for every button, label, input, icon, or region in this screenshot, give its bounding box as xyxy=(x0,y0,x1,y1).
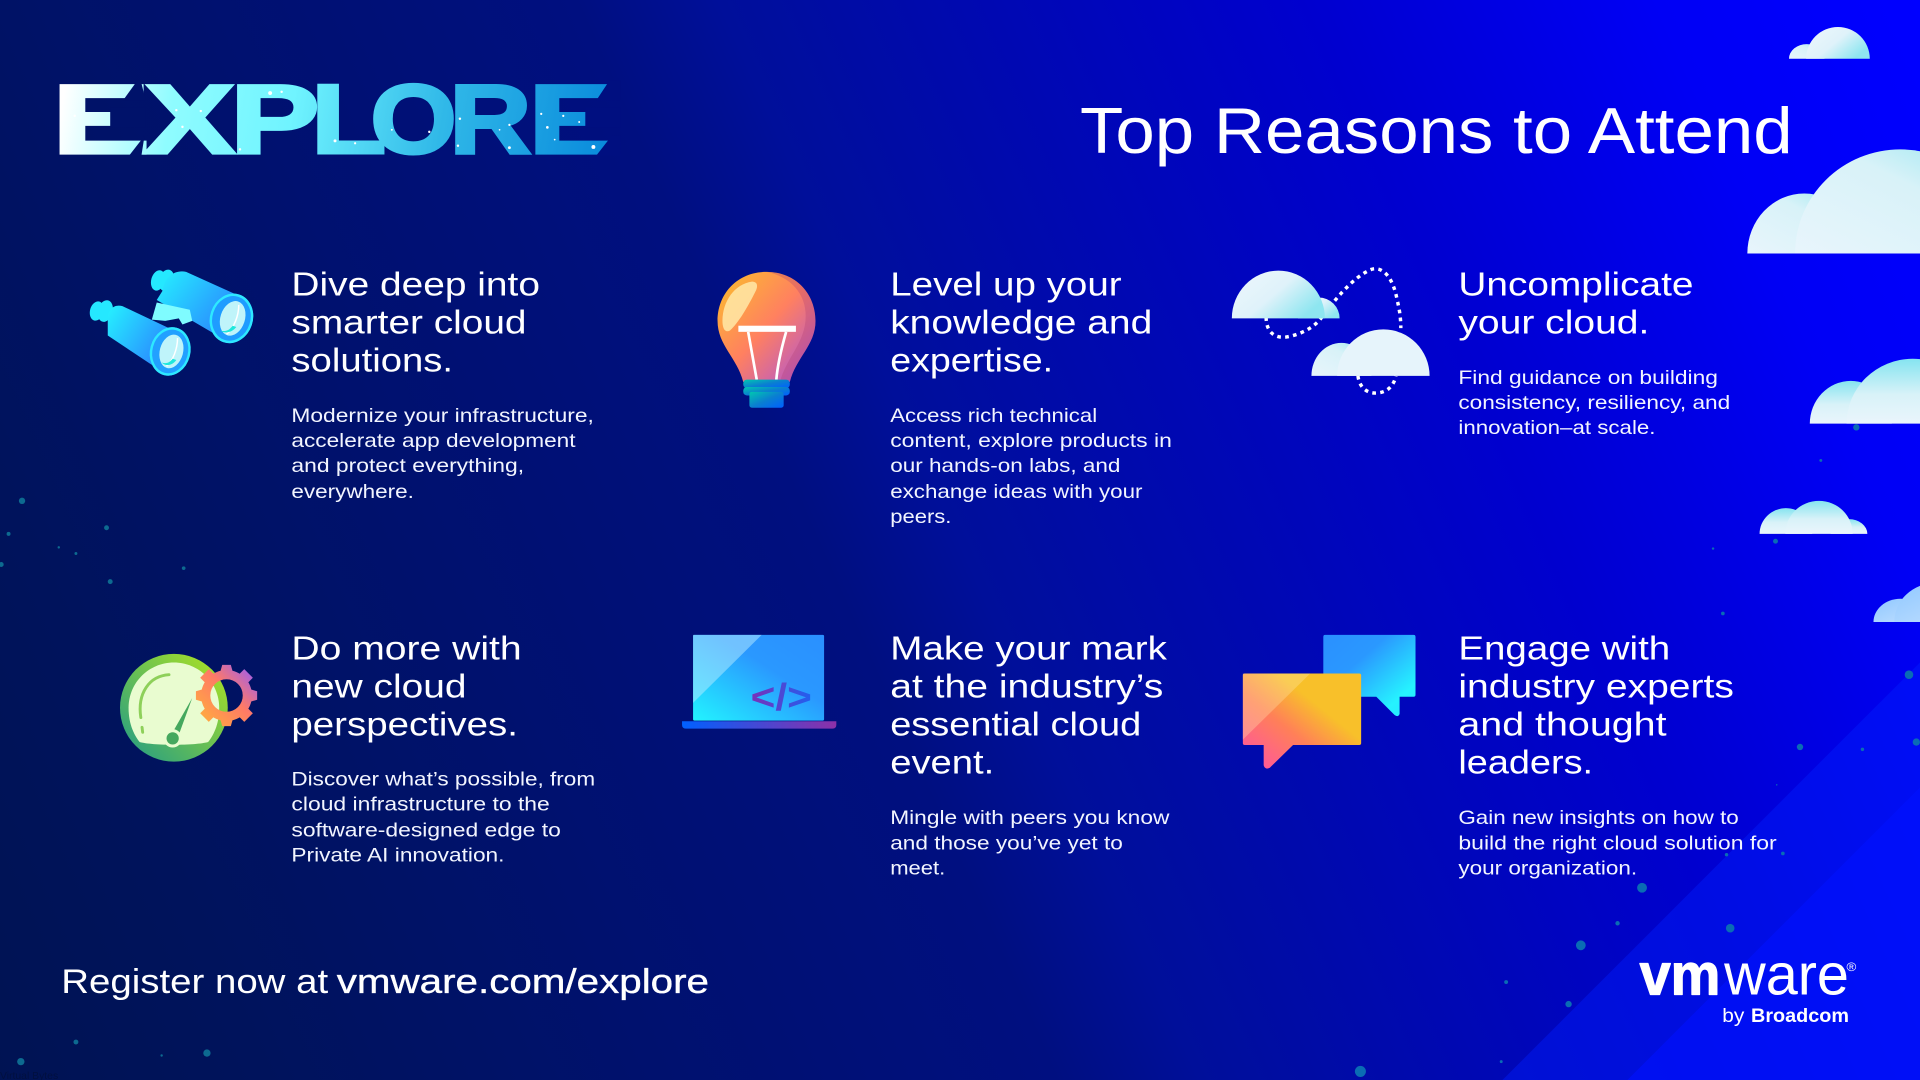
body text: and protect everything, xyxy=(291,455,524,477)
body text: Find guidance on building xyxy=(1458,367,1718,389)
heading xyxy=(291,630,522,743)
body text: cloud infrastructure to the xyxy=(291,794,550,816)
logo: EXPLORE: O xyxy=(370,64,457,174)
heading: knowledge and xyxy=(890,305,1152,342)
heading: Engage with xyxy=(1458,630,1670,667)
body text: innovation–at scale. xyxy=(1458,417,1656,439)
cloud: right middle xyxy=(1810,359,1920,424)
heading: new cloud xyxy=(291,668,467,705)
logo: vmware by Broadcom: ® xyxy=(1847,960,1856,974)
logo: EXPLORE: P xyxy=(230,64,320,174)
heading: Do more with xyxy=(291,630,522,667)
body text: and those you’ve yet to xyxy=(890,833,1123,855)
heading: your cloud. xyxy=(1458,305,1649,342)
cloud: right lower xyxy=(1760,501,1867,534)
logo: EXPLORE: E xyxy=(528,64,619,174)
panel: engage xyxy=(1243,630,1777,879)
body text: accelerate app development xyxy=(291,430,576,452)
icon: clouds with dotted path xyxy=(1232,269,1430,393)
body text: your organization. xyxy=(1458,857,1637,879)
heading: smarter cloud xyxy=(291,305,527,342)
register call to action: vmware.com/explore xyxy=(337,963,709,1001)
logo: EXPLORE: E xyxy=(52,64,150,174)
heading: Dive deep into xyxy=(291,267,540,304)
body text: Gain new insights on how to xyxy=(1458,807,1739,829)
register call to action xyxy=(61,963,709,1001)
icon: laptop: </> xyxy=(751,677,812,719)
body text: Access rich technical xyxy=(890,405,1097,427)
panel: uncomplicate xyxy=(1232,267,1730,439)
heading: Uncomplicate xyxy=(1458,267,1693,304)
heading: expertise. xyxy=(890,343,1053,380)
cloud: top right small xyxy=(1789,27,1870,59)
body text: exchange ideas with your xyxy=(890,481,1143,503)
scattered dots xyxy=(0,424,1920,1077)
cloud: top right large xyxy=(1747,149,1920,253)
diagonal light bands xyxy=(1502,662,1920,1080)
panel: level up xyxy=(718,267,1172,528)
heading: event. xyxy=(890,744,994,781)
heading: Make your mark xyxy=(890,630,1167,667)
heading: solutions. xyxy=(291,343,453,380)
body text: meet. xyxy=(890,857,945,879)
logo: vmware by Broadcom: by xyxy=(1722,1005,1744,1027)
panel: do more xyxy=(120,630,595,866)
logo: EXPLORE xyxy=(52,64,621,174)
body text xyxy=(890,405,1172,528)
body text: Discover what’s possible, from xyxy=(291,769,595,791)
heading xyxy=(291,267,540,380)
body text: Modernize your infrastructure, xyxy=(291,405,594,427)
panel: dive deep xyxy=(88,267,594,503)
body text: peers. xyxy=(890,506,951,528)
heading: essential cloud xyxy=(890,706,1141,743)
body text xyxy=(291,405,594,503)
body text xyxy=(890,807,1170,879)
icon: binoculars xyxy=(88,268,260,380)
icon: chat bubbles xyxy=(1243,635,1416,769)
heading: perspectives. xyxy=(291,706,518,743)
icon: lightbulb xyxy=(718,272,816,408)
icon: laptop xyxy=(682,635,836,729)
body text xyxy=(1458,367,1730,439)
body text: everywhere. xyxy=(291,481,414,503)
body text: content, explore products in xyxy=(890,430,1172,452)
logo: vmware by Broadcom: ware xyxy=(1723,942,1849,1007)
panel: make your mark xyxy=(682,630,1170,879)
register call to action: Register now at xyxy=(61,963,329,1001)
logo: EXPLORE: L xyxy=(311,64,386,174)
title: Top Reasons to Attend xyxy=(1080,94,1793,167)
heading: leaders. xyxy=(1458,744,1593,781)
cloud: right edge blue xyxy=(1873,583,1920,622)
heading xyxy=(890,267,1152,380)
body text: build the right cloud solution for xyxy=(1458,833,1777,855)
body text: software-designed edge to xyxy=(291,819,561,841)
body text: Mingle with peers you know xyxy=(890,807,1170,829)
body text: our hands-on labs, and xyxy=(890,455,1120,477)
logo: vmware by Broadcom: vm xyxy=(1640,942,1720,1007)
body text: consistency, resiliency, and xyxy=(1458,392,1730,414)
heading: and thought xyxy=(1458,706,1667,743)
logo: EXPLORE: X xyxy=(144,64,235,174)
body text: Private AI innovation. xyxy=(291,844,504,866)
heading: at the industry’s xyxy=(890,668,1163,705)
body text xyxy=(1458,807,1777,879)
icon: gauge and gear xyxy=(120,654,257,762)
logo: vmware by Broadcom xyxy=(1640,942,1856,1027)
logo: vmware by Broadcom: Broadcom xyxy=(1751,1005,1849,1027)
heading xyxy=(890,630,1167,781)
heading: industry experts xyxy=(1458,668,1734,705)
heading: Level up your xyxy=(890,267,1122,304)
heading xyxy=(1458,630,1734,781)
logo: EXPLORE: R xyxy=(449,64,531,174)
body text xyxy=(291,769,595,866)
heading xyxy=(1458,267,1693,342)
